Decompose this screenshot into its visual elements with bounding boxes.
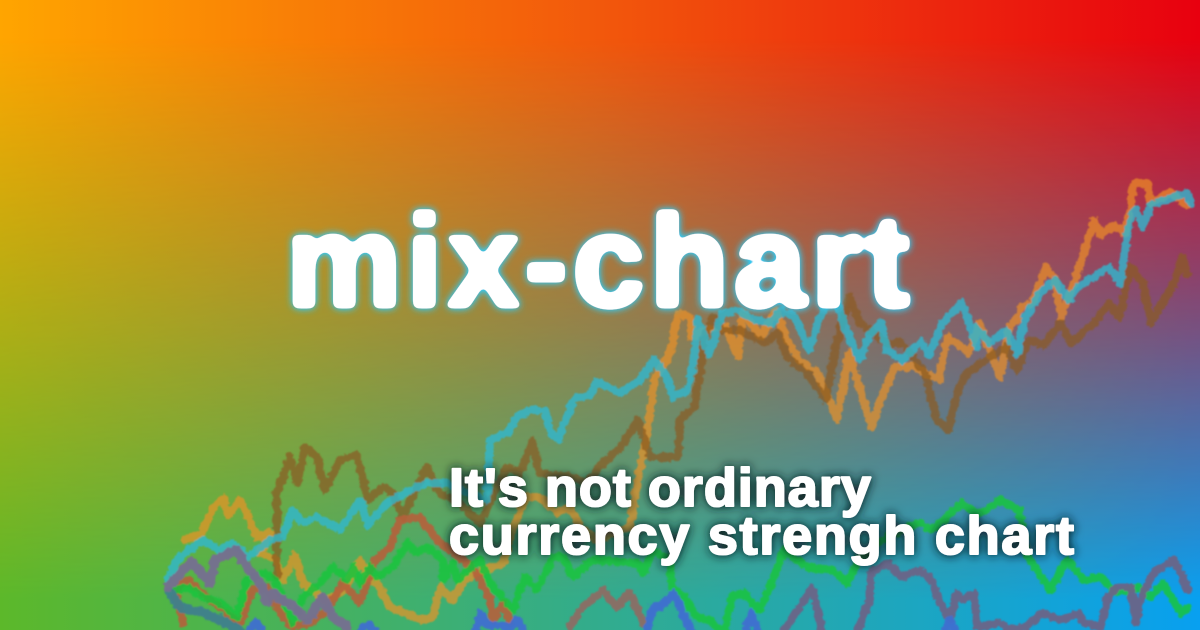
line: olive-brown <box>277 257 1187 577</box>
line: dark teal <box>170 593 240 630</box>
line: green <box>177 500 1188 630</box>
line: blue segments <box>250 593 955 630</box>
line: teal-blue <box>168 193 1191 580</box>
title: mix-chart: mix-chart <box>286 188 914 334</box>
tagline line 1: It's not ordinary <box>449 458 872 518</box>
tagline line 2: currency strengh chart <box>449 506 1076 566</box>
line: copper <box>175 517 510 627</box>
line: slate purple <box>168 550 347 627</box>
line: mauve-brown <box>570 590 643 627</box>
subtitle: tagline <box>449 458 1076 566</box>
line: indigo far right <box>858 560 1188 630</box>
line: tan-orange <box>185 183 1186 620</box>
line: indigo right <box>784 588 822 630</box>
line chart: currency strength lines <box>168 183 1191 630</box>
